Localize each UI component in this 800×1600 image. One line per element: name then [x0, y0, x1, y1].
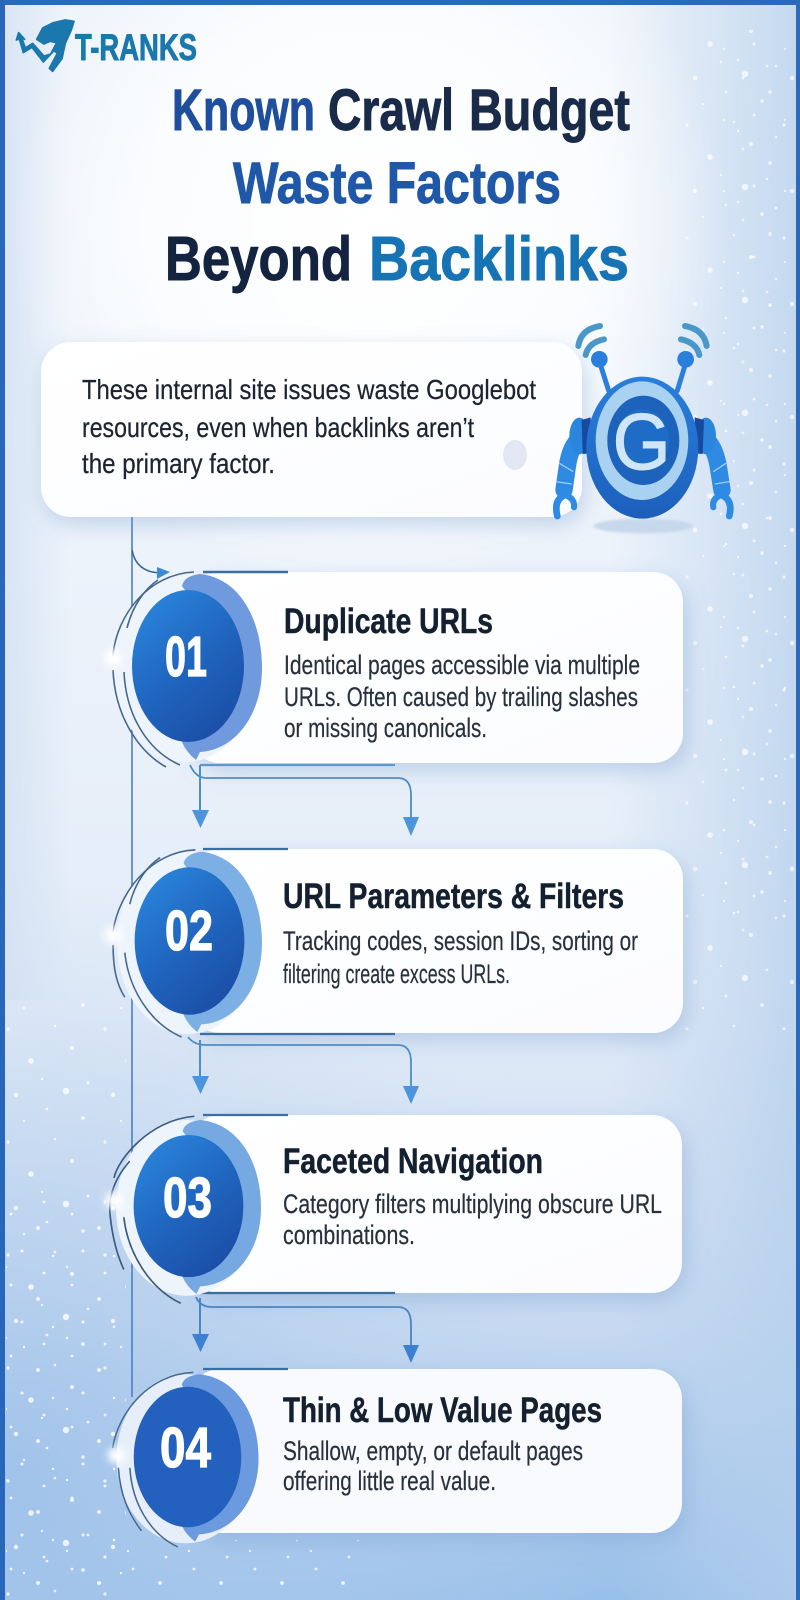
top connector — [203, 1368, 288, 1370]
panel: card 1 — [190, 572, 683, 763]
badge 04: 04 — [160, 1416, 211, 1480]
title: Budget — [469, 78, 630, 143]
vertical timeline line — [131, 517, 133, 1397]
arrows — [192, 1297, 419, 1363]
arrows — [188, 1037, 419, 1104]
arrows — [190, 765, 419, 836]
logo: T-RANKS: T-RANKS — [75, 27, 197, 68]
panel: card 4 — [190, 1369, 682, 1533]
description: offering little real value. — [283, 1466, 496, 1496]
description: or missing canonicals. — [284, 713, 487, 743]
description — [283, 1436, 583, 1496]
description: combinations. — [283, 1220, 415, 1250]
heading: URL Parameters & Filters — [283, 877, 624, 916]
panel: intro — [41, 342, 582, 517]
description: Identical pages accessible via multiple — [284, 650, 640, 680]
panel: card 3 — [190, 1115, 682, 1293]
icon: dinosaur and rising arrow — [16, 20, 74, 71]
description: Shallow, empty, or default pages — [283, 1436, 583, 1466]
intro text: the primary factor. — [82, 448, 275, 479]
badge 02: 02 — [165, 899, 213, 963]
title: Backlinks — [369, 225, 629, 294]
description: Tracking codes, session IDs, sorting or — [283, 926, 638, 956]
step 4: Thin & Low Value Pages — [108, 1369, 682, 1547]
description: filtering create excess URLs. — [283, 959, 510, 989]
heading: Duplicate URLs — [284, 602, 493, 641]
top connector — [132, 550, 395, 765]
title — [165, 78, 630, 294]
title: Crawl — [328, 78, 454, 143]
title: Beyond — [165, 225, 352, 294]
step 2: URL Parameters & Filters — [104, 849, 683, 1104]
badge 04 — [108, 1372, 259, 1547]
top connector — [200, 849, 395, 1034]
intro text — [82, 374, 536, 479]
heading: Thin & Low Value Pages — [283, 1391, 602, 1430]
icon: Googlebot robot — [556, 326, 730, 533]
badge 03 — [105, 1116, 261, 1303]
description: URLs. Often caused by trailing slashes — [284, 682, 638, 712]
top connector — [200, 1115, 395, 1293]
step 3: Faceted Navigation — [105, 1115, 682, 1363]
intro text: These internal site issues waste Googlebot — [82, 374, 536, 405]
badge 01: 01 — [165, 625, 207, 689]
description — [283, 926, 638, 989]
title: Waste Factors — [233, 151, 561, 216]
icon: Googlebot robot: G — [613, 397, 671, 486]
badge 02 — [104, 850, 262, 1037]
heading: Faceted Navigation — [283, 1142, 543, 1181]
badge 03: 03 — [163, 1166, 212, 1230]
logo: T-RANKS — [16, 20, 197, 71]
panel: card 2 — [190, 849, 683, 1033]
description: Category filters multiplying obscure URL — [283, 1189, 662, 1219]
badge 01 — [104, 572, 262, 767]
description — [283, 1189, 662, 1250]
description — [284, 650, 640, 743]
title: Known — [172, 78, 315, 143]
step 1: Duplicate URLs — [104, 550, 683, 836]
intro text: resources, even when backlinks aren’t — [82, 412, 474, 443]
